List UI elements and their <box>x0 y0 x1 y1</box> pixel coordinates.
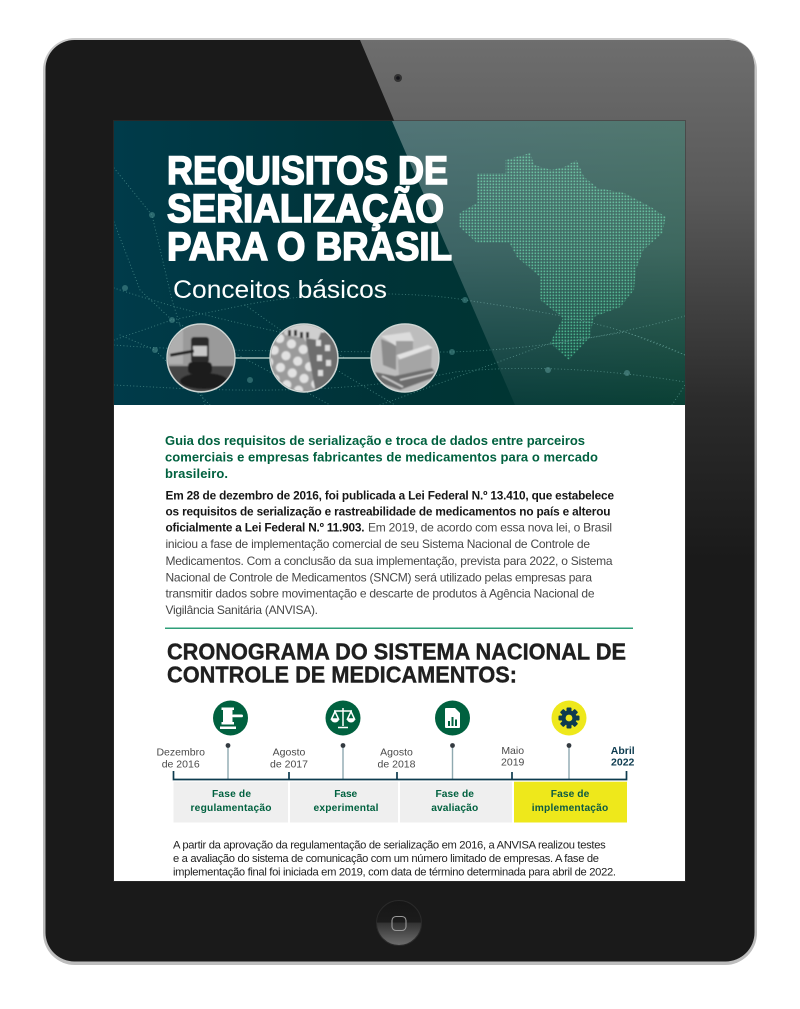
white content panel <box>114 405 685 881</box>
phase: experimental <box>290 782 398 822</box>
date labels: 2019 <box>501 757 525 769</box>
intro body text: os requisitos de serialização e rastreabilidade de medicamentos no país e alterou <box>166 505 610 519</box>
glass reflection <box>360 40 754 560</box>
dotted network lines <box>114 168 685 405</box>
date labels: Abril <box>611 745 635 757</box>
phase: implementação <box>514 782 627 822</box>
timeline heading: CRONOGRAMA DO SISTEMA NACIONAL DE <box>167 638 626 664</box>
intro body text: Nacional de Controle de Medicamentos (SNCM) será utilizado pelas empresas para <box>166 571 592 585</box>
title: PARA O BRASIL <box>167 225 452 269</box>
photo: gavel <box>167 324 235 396</box>
timeline heading <box>167 638 626 688</box>
date labels: de 2016 <box>162 758 200 770</box>
intro body text: Vigilância Sanitária (ANVISA). <box>166 603 318 617</box>
network nodes <box>122 212 630 383</box>
phase: implementação: implementação <box>532 803 608 814</box>
phase: avaliação: avaliação <box>431 803 478 814</box>
header banner <box>114 121 685 405</box>
subtitle: Conceitos básicos <box>173 276 387 304</box>
intro body text: Em 2019, de acordo com essa nova lei, o Brasil <box>368 521 612 535</box>
date labels <box>156 745 635 770</box>
intro heading <box>165 433 598 481</box>
timeline heading: CONTROLE DE MEDICAMENTOS: <box>167 662 517 688</box>
phase stems <box>228 746 569 779</box>
title <box>167 149 452 269</box>
timeline description <box>173 840 616 878</box>
phase: implementação: Fase de <box>551 789 590 800</box>
intro body text <box>166 488 614 617</box>
date labels: Dezembro <box>156 746 205 758</box>
phase: avaliação: Fase de <box>435 789 474 800</box>
date labels: Maio <box>501 745 524 757</box>
intro heading: Guia dos requisitos de serialização e troca de dados entre parceiros <box>165 433 585 448</box>
phase: regulamentação: Fase de <box>212 789 251 800</box>
date labels: Agosto <box>273 746 305 758</box>
phase: avaliação <box>400 782 512 822</box>
glass reflection on banner <box>392 121 685 405</box>
intro heading: comerciais e empresas fabricantes de medicamentos para o mercado <box>165 450 598 464</box>
intro body text: iniciou a fase de implementação comercial de seu Sistema Nacional de Controle de <box>166 537 590 551</box>
photo: boxes on pallet <box>371 324 439 392</box>
photo: blister packs <box>268 322 340 394</box>
icon: document with chart <box>435 700 470 736</box>
timeline description: e a avaliação do sistema de comunicação com um número limitado de empresas. A fase de <box>173 853 599 865</box>
date labels: de 2018 <box>378 758 416 770</box>
intro body text: Medicamentos. Com a conclusão da sua implementação, prevista para 2022, o Sistema <box>166 554 613 568</box>
icon: scales <box>326 700 360 736</box>
map of Brazil <box>460 153 666 360</box>
intro body text: oficialmente a Lei Federal N.º 11.903. <box>166 521 364 535</box>
title: REQUISITOS DE <box>167 149 448 193</box>
date labels: 2022 <box>611 757 635 769</box>
connector between photos <box>235 357 372 359</box>
date labels: de 2017 <box>270 758 308 770</box>
timeline description: implementação final foi iniciada em 2019, com data de término determinada para abril de 2022. <box>173 866 616 878</box>
screen <box>113 120 686 882</box>
intro body text: Em 28 de dezembro de 2016, foi publicada a Lei Federal N.º 13.410, que estabelece <box>166 488 614 502</box>
icon: gear <box>552 700 586 736</box>
timeline description: A partir da aprovação da regulamentação de serialização em 2016, a ANVISA realizou testes <box>173 840 606 852</box>
camera <box>394 74 402 82</box>
phase: regulamentação <box>174 782 288 822</box>
title: SERIALIZAÇÃO <box>167 185 444 231</box>
phase: experimental: Fase <box>334 789 358 800</box>
time axis <box>174 771 626 780</box>
icon: gavel <box>213 700 248 736</box>
timeline <box>156 700 635 822</box>
phase: regulamentação: regulamentação <box>190 803 272 814</box>
date labels: Agosto <box>380 746 413 758</box>
phase: experimental: experimental <box>314 803 379 814</box>
intro body text: transmitir dados sobre movimentação e descarte de produtos à Agência Nacional de <box>166 587 595 601</box>
home button <box>376 900 422 946</box>
intro heading: brasileiro. <box>165 466 228 481</box>
